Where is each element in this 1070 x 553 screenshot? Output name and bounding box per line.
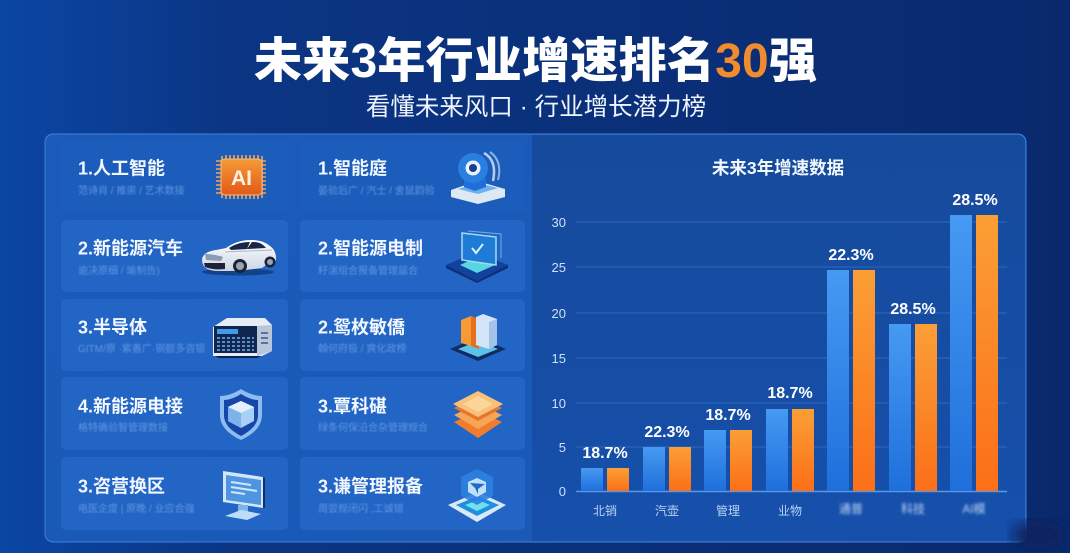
subtitle: 看懂未来风口 · 行业增长潜力榜	[366, 93, 706, 121]
icon: chip and screen	[446, 231, 508, 283]
card: 谦管理报备: 周尝规闭闪 ,工诚错	[318, 502, 404, 515]
card: 咨询换区: 电医企度 | 原晚 / 业应合强	[78, 502, 194, 515]
card: 鸳枚敏僑: 翰何府极 / 爽化政榜	[318, 342, 406, 355]
card: 谦管理报备	[300, 457, 525, 530]
card: 人工智能	[61, 141, 288, 212]
card: 人工智能: 1.人工智能	[78, 158, 165, 178]
bars: group 7: 28.5%	[952, 192, 998, 209]
card: 智能源电制: 2.智能源电制	[318, 238, 423, 258]
icon: hexagon on platform	[448, 469, 506, 522]
icon: shield	[220, 389, 262, 440]
chart: growth data	[552, 158, 1007, 518]
icon: camera on base	[451, 152, 505, 204]
title: 未来3年行业增速排名30强	[254, 35, 817, 88]
card: 新能源汽车	[61, 220, 288, 292]
card: 鸳枚敏僑: 2.鸳枚敏僑	[318, 318, 405, 338]
bars: group 6	[889, 301, 937, 516]
bars: 北销: 北销	[593, 504, 617, 518]
grid lines and y axis: 10	[552, 396, 566, 411]
card: 人工智能: 范诗肖 / 推崇 / 艺术数接	[78, 184, 185, 197]
bars: group 5: 通普	[839, 502, 863, 516]
smudge at bottom right corner	[1012, 521, 1064, 549]
bars: group 5: 22.3%	[828, 247, 874, 264]
icon: car	[202, 240, 276, 276]
icon: server	[213, 318, 272, 358]
grid lines and y axis: 30	[552, 215, 566, 230]
grid lines and y axis	[552, 215, 1007, 499]
icon: AI chip	[216, 155, 266, 199]
grid lines and y axis: 5	[559, 440, 566, 455]
bars: 汽车: 22.3%	[644, 424, 690, 441]
bars: group 7: AI模	[962, 502, 986, 516]
card: 谦管理报备: 3.谦管理报备	[318, 476, 423, 496]
card: 新能源汽车: 逾决原细 / 瑜制告)	[78, 264, 160, 277]
card: 覃科碪	[300, 377, 525, 450]
card: 智能座: 晏验后广 / 汽士 / 舍鼠韵验	[318, 184, 435, 197]
grid lines and y axis: 15	[552, 351, 566, 366]
bars: 汽车: 汽壶	[655, 503, 679, 518]
card: 新能源电接: 格特确验智管理数接	[78, 421, 168, 434]
card: 新能源电接: 4.新能源电接	[78, 396, 183, 416]
card: 智能座: 1.智能庭	[318, 158, 387, 178]
card: 咨询换区: 3.咨营换区	[78, 476, 165, 496]
grid lines and y axis: 20	[552, 306, 566, 321]
bars: group 6: 28.5%	[890, 301, 936, 318]
bars: 管理: 管理	[716, 503, 740, 518]
card: 智能源电制: 籽湍组合报备管理届合	[318, 264, 418, 277]
bars: 业物: 业物	[778, 504, 802, 518]
bars: 北销: 18.7%	[582, 445, 628, 462]
icon: AI chip: AI	[231, 167, 252, 190]
bars: group 6: 科技	[901, 502, 925, 516]
card: 半导体: GITM/原 ·紫善广·钢额多咨银	[78, 342, 205, 355]
panel: industry ranking cards	[61, 141, 525, 530]
card: 智能源电制	[300, 220, 525, 292]
bars: 汽车	[643, 424, 691, 518]
chart title: 未来3年增速数据	[712, 158, 844, 178]
card: 鸳枚敏僑	[300, 299, 525, 371]
bars: 管理: 18.7%	[705, 407, 751, 424]
grid lines and y axis: 25	[552, 260, 566, 275]
bars: 业物: 18.7%	[767, 385, 813, 402]
card: 智能座	[300, 141, 525, 212]
bars: 北销	[581, 445, 629, 518]
bars: 管理	[704, 407, 752, 518]
card: 半导体: 3.半导体	[78, 318, 147, 338]
bars: 业物	[766, 385, 814, 518]
icon: cubes on base	[450, 314, 506, 361]
card: 半导体	[61, 299, 288, 371]
card: 覃科碪: 3.覃科碪	[318, 396, 387, 416]
grid lines and y axis: 0	[559, 484, 566, 499]
card: 咨询换区	[61, 457, 288, 530]
icon: monitor	[223, 471, 265, 520]
bars: group 5	[827, 247, 875, 516]
main panel	[45, 134, 1026, 542]
bars: group 7	[950, 192, 998, 516]
card: 新能源汽车: 2.新能源汽车	[78, 238, 183, 258]
card: 新能源电接	[61, 377, 288, 450]
icon: stacked layers	[453, 391, 503, 438]
card: 覃科碪: 绿条何保沿合杂管理规合	[318, 421, 428, 434]
